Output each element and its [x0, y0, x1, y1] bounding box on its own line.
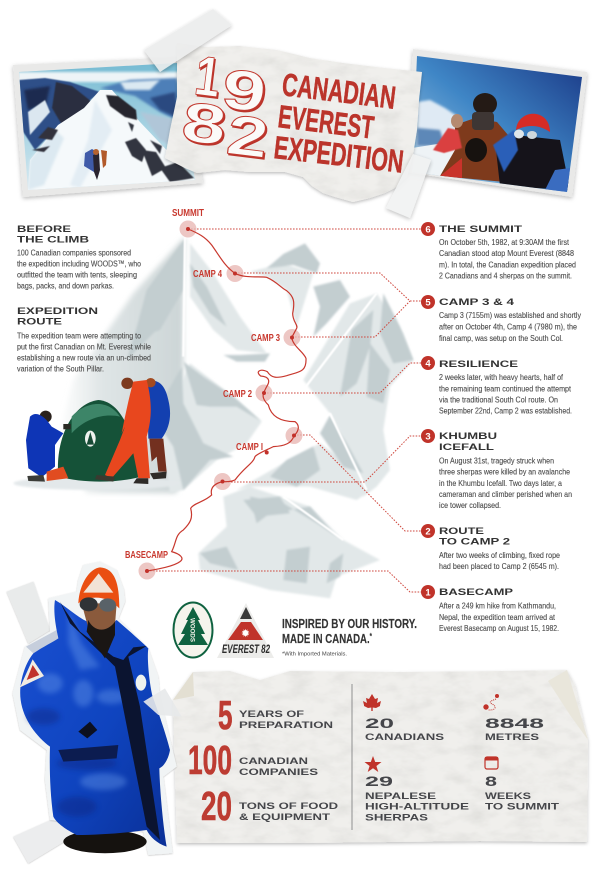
- photo: climbers on snow ridge: [13, 57, 205, 197]
- text: before the climb: 100 Canadian companies sponsored: [17, 248, 131, 258]
- stat: 5 years of preparation: PREPARATION: [239, 720, 333, 731]
- step 1: basecamp: After a 249 km hike from Kathmandu,: [439, 600, 556, 610]
- text: before the climb: outfitted the team with tents, sleeping: [17, 270, 137, 280]
- icon: climbers: [84, 149, 107, 180]
- mountain illustration: [57, 237, 413, 598]
- title year 1982: 1: [193, 45, 225, 111]
- climber centre, orange suit: [95, 378, 151, 484]
- step 4: resilience: via the traditional South Col route. On: [439, 394, 558, 404]
- step 1: basecamp: 1: [425, 588, 431, 598]
- title year 1982: [178, 43, 273, 172]
- step 6: the summit: 2 Canadians and 4 sherpas on the summit.: [439, 270, 572, 280]
- photo: team with tent: [13, 378, 180, 490]
- stat: 20 tons of food: TONS OF FOOD: [239, 801, 338, 812]
- photo: two climbers at summit: [405, 49, 590, 200]
- text: before the climb: the expedition including WOODS™, who: [17, 258, 141, 268]
- step 5: camp 3 and 4: final camp, was setup on the South Col.: [439, 333, 563, 343]
- stat: 20 canadians: 20: [365, 716, 394, 731]
- step 2: route to camp 2: had been placed to Camp 2 (6545 m).: [439, 561, 559, 571]
- tape: right photo: [386, 154, 431, 218]
- step 5: camp 3 and 4: 5: [425, 298, 431, 308]
- tape: shoulder: [143, 688, 182, 717]
- logo: everest 82: [217, 603, 274, 658]
- stat: 29 nepalese sherpas: NEPALESE: [365, 791, 437, 802]
- step 5: camp 3 and 4: [421, 295, 582, 343]
- map labels: CAMP 3: [251, 332, 280, 344]
- title year 1982: 8: [179, 89, 230, 157]
- tape: top: [144, 9, 232, 72]
- tagline: INSPIRED BY OUR HISTORY.: [282, 616, 417, 631]
- map labels: CAMP I: [236, 441, 263, 453]
- map labels: [125, 207, 280, 561]
- text: expedition route: put the first Canadian on Mt. Everest while: [17, 342, 151, 352]
- stat: 5 years of preparation: 5: [218, 692, 232, 738]
- stat: 8848 metres: METRES: [485, 732, 540, 743]
- text: expedition route: ROUTE: [17, 316, 63, 328]
- right climber: [493, 114, 570, 192]
- stat: 5 years of preparation: YEARS OF: [239, 709, 304, 720]
- title year 1982: 2: [225, 104, 273, 172]
- map labels: SUMMIT: [172, 207, 204, 219]
- step 3: khumbu icefall: in the Khumbu Icefall. Two days later, a: [439, 478, 562, 488]
- step 3: khumbu icefall: ice tower collapsed.: [439, 500, 501, 510]
- title year 1982: 8: [180, 91, 231, 159]
- logo: woods: [174, 602, 212, 658]
- title text: [272, 66, 405, 180]
- title text: CANADIAN: [280, 66, 398, 116]
- stat: 100 canadian companies: COMPANIES: [239, 767, 319, 778]
- stat: 8 weeks to summit: WEEKS: [485, 791, 532, 802]
- stat: 20 canadians: [365, 716, 445, 743]
- stat: 8 weeks to summit: [485, 774, 559, 812]
- trousers: [63, 830, 147, 853]
- stat: 8848 metres: [485, 716, 545, 743]
- icon: star: [364, 756, 382, 772]
- step 4: resilience: 4: [425, 358, 431, 370]
- step 4: resilience: RESILIENCE: [439, 359, 519, 370]
- step 3: khumbu icefall: 3: [425, 432, 431, 442]
- step 1: basecamp: [421, 585, 559, 633]
- title year 1982: 9: [219, 56, 270, 124]
- stat: 5 years of preparation: [218, 692, 333, 738]
- tagline: *: [370, 632, 373, 641]
- tagline: MADE IN CANADA.: [282, 631, 400, 646]
- step 2: route to camp 2: TO CAMP 2: [439, 536, 510, 548]
- step 6: the summit: 6: [425, 224, 431, 236]
- step 2: route to camp 2: After two weeks of climbing, fixed rope: [439, 550, 560, 560]
- stat: 100 canadian companies: [188, 737, 319, 783]
- climber right, blue parka: [146, 378, 170, 479]
- stat: 100 canadian companies: 100: [188, 737, 232, 783]
- stat: 20 tons of food: [201, 783, 338, 829]
- stat: 8848 metres: 8848: [485, 716, 545, 731]
- stat: 20 canadians: CANADIANS: [365, 732, 445, 743]
- logo: everest 82: ✹: [241, 628, 250, 640]
- icon: maple leaf: [363, 694, 381, 711]
- step 1: basecamp: Everest Basecamp on August 15, 1982.: [439, 623, 559, 633]
- text: before the climb: bags, packs, and down parkas.: [17, 280, 114, 290]
- route dotted connectors: [147, 229, 422, 592]
- step 6: the summit: THE SUMMIT: [439, 224, 522, 235]
- stat: 29 nepalese sherpas: HIGH-ALTITUDE: [365, 802, 470, 812]
- step 4: resilience: the remaining team continued the attempt: [439, 384, 572, 394]
- step 5: camp 3 and 4: CAMP 3 & 4: [439, 297, 515, 308]
- route map markers and path: [138, 220, 306, 580]
- tagline: *With Imported Materials.: [282, 652, 347, 658]
- text: expedition route: variation of the South Pillar.: [17, 364, 104, 374]
- text: before the climb: [17, 224, 141, 290]
- title text: EXPEDITION: [272, 129, 405, 180]
- left climber: [433, 93, 508, 182]
- tape: left top: [7, 582, 50, 643]
- map labels: BASECAMP: [125, 549, 168, 561]
- photo: climber in blue parka: [7, 562, 182, 863]
- step 3: khumbu icefall: KHUMBU: [439, 431, 497, 442]
- stat: 29 nepalese sherpas: [365, 774, 470, 824]
- text: expedition route: establishing a new route via an un-climbed: [17, 352, 151, 362]
- tagline: [282, 616, 417, 658]
- parka: [20, 600, 170, 847]
- text: expedition route: The expedition team were attempting to: [17, 330, 141, 340]
- tape: lower left: [13, 815, 75, 863]
- stat: 8 weeks to summit: TO SUMMIT: [485, 802, 559, 812]
- step 2: route to camp 2: [421, 524, 560, 571]
- map labels: CAMP 4: [193, 268, 222, 280]
- step 3: khumbu icefall: three sherpas were killed by an avalanche: [439, 466, 570, 476]
- step 3: khumbu icefall: [421, 429, 572, 510]
- step 6: the summit: m). In total, the Canadian expedition placed: [439, 260, 576, 270]
- torn photo backing: [13, 562, 177, 855]
- stat: 29 nepalese sherpas: SHERPAS: [365, 812, 429, 824]
- step 2: route to camp 2: 2: [425, 526, 431, 538]
- map labels: CAMP 2: [223, 388, 252, 400]
- face and hat: [82, 603, 117, 635]
- stat: 20 tons of food: 20: [201, 783, 232, 829]
- climber left, blue parka: [26, 411, 71, 482]
- text: expedition route: EXPEDITION: [17, 306, 98, 317]
- step 4: resilience: 2 weeks later, with heavy hearts, half of: [439, 372, 563, 382]
- text: expedition route: [17, 306, 151, 374]
- logo: woods: WOODS: [188, 618, 194, 642]
- patch: [20, 659, 44, 687]
- logo: everest 82: EVEREST 82: [222, 642, 270, 656]
- title year 1982: 9: [220, 58, 271, 126]
- icon: calendar: [485, 757, 498, 769]
- stat: 20 tons of food: & EQUIPMENT: [239, 812, 330, 823]
- step 4: resilience: September 22nd, Camp 2 was established.: [439, 406, 572, 416]
- step 1: basecamp: BASECAMP: [439, 587, 514, 598]
- step 1: basecamp: Nepal, the expedition team arrived at: [439, 612, 555, 622]
- title year 1982: 1: [192, 43, 224, 109]
- stat: 100 canadian companies: CANADIAN: [239, 756, 308, 767]
- stat: 29 nepalese sherpas: 29: [365, 774, 393, 789]
- step 3: khumbu icefall: ICEFALL: [439, 442, 494, 453]
- step 5: camp 3 and 4: after on October 4th, Camp 4 (7980 m), the: [439, 322, 577, 332]
- title paper: [165, 43, 422, 202]
- step 6: the summit: Canadian stood atop Mount Everest (8848: [439, 248, 574, 258]
- step 4: resilience: [421, 356, 572, 416]
- stat: 8 weeks to summit: 8: [485, 774, 498, 789]
- step 6: the summit: On October 5th, 1982, at 9:30AM the first: [439, 237, 569, 247]
- text: before the climb: BEFORE: [17, 224, 72, 235]
- step 2: route to camp 2: ROUTE: [439, 526, 485, 537]
- tent: [58, 400, 142, 482]
- step 3: khumbu icefall: On August 31st, tragedy struck when: [439, 456, 554, 466]
- title year 1982: 2: [224, 102, 272, 170]
- step 6: the summit: [421, 222, 576, 280]
- title text: EVEREST: [276, 98, 376, 146]
- text: before the climb: THE CLIMB: [17, 234, 89, 246]
- icon: route: [484, 694, 498, 710]
- step 3: khumbu icefall: cameraman and climber perished when an: [439, 489, 572, 499]
- stats paper: [173, 670, 588, 843]
